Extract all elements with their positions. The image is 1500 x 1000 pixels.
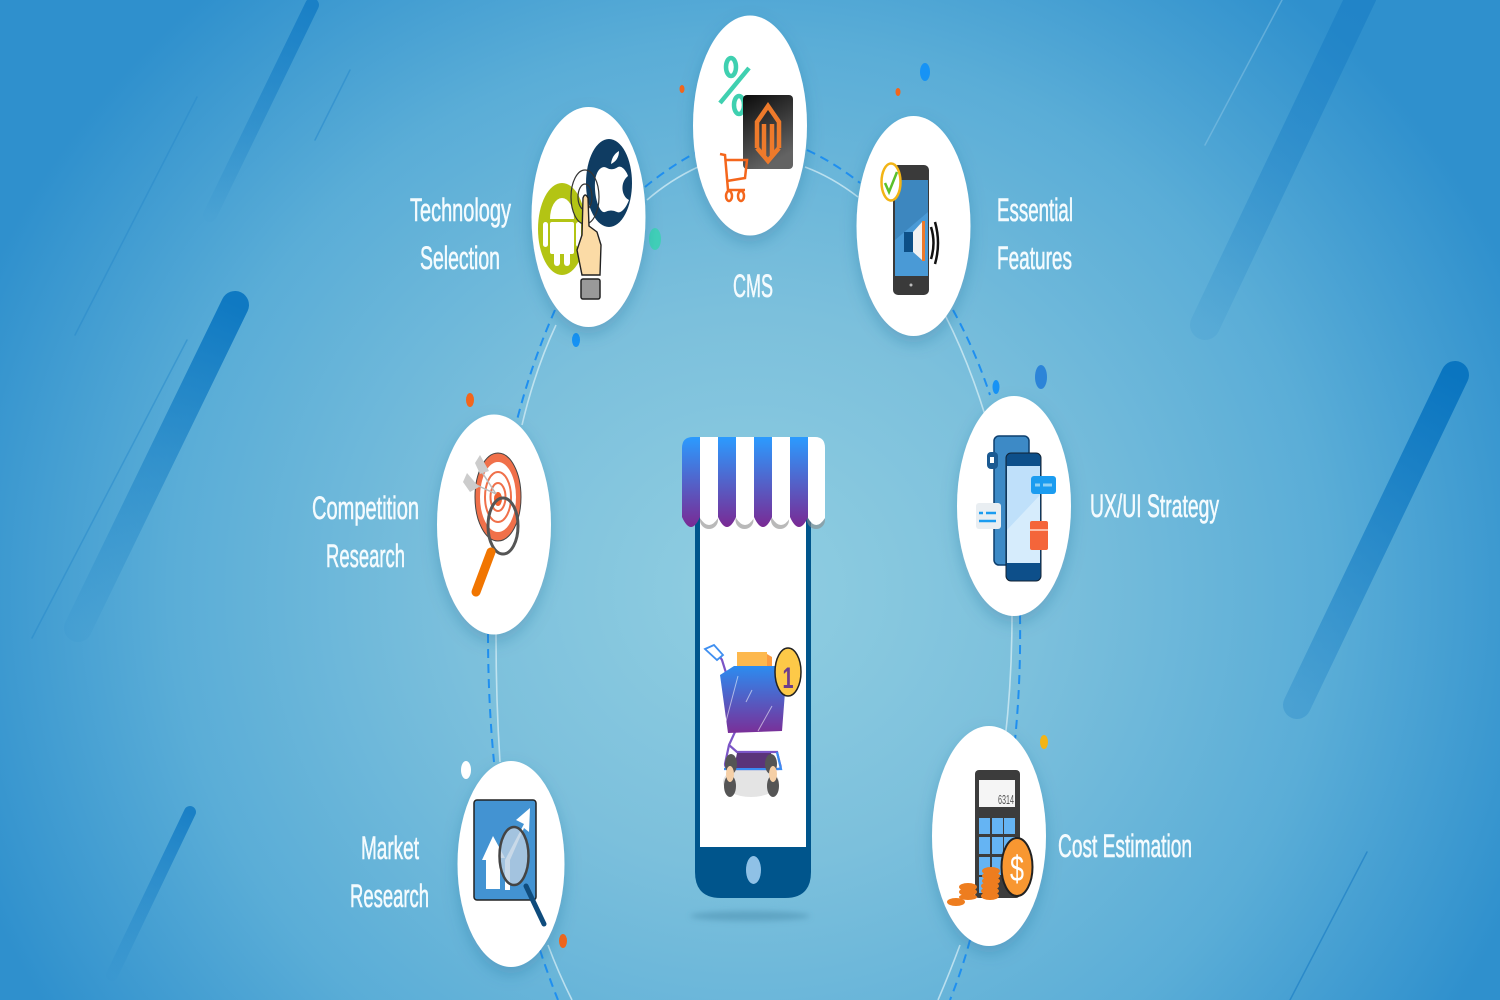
label: UX/UI Strategy: UX/UI Strategy (1090, 488, 1219, 524)
label: Essential Features (997, 192, 1073, 276)
connecting ring: white line (496, 167, 1012, 1000)
label: Technology Selection: Selection (420, 240, 500, 276)
panel: Cost Estimation icon: $ (1010, 848, 1024, 889)
panel: CMS icon (693, 16, 807, 236)
awning (682, 437, 825, 529)
label: Technology Selection: Technology (410, 192, 511, 228)
panel: Technology Selection icon (532, 107, 646, 327)
icon: shopping cart with badge (705, 645, 801, 797)
label: Essential Features: Essential (997, 192, 1073, 228)
decorative dots (461, 63, 1048, 948)
panel: UX/UI Strategy icon (957, 396, 1071, 616)
label: CMS: CMS (733, 268, 773, 304)
icon: shopping cart with badge: 1 (782, 662, 794, 695)
central storefront phone (682, 437, 825, 921)
connecting ring: blue dashed line (488, 150, 1020, 1000)
label: Competition Research (312, 490, 419, 574)
label: Market Research (350, 830, 429, 914)
panel: Competition Research icon (437, 414, 551, 634)
label: Market Research: Research (350, 878, 429, 914)
label: Market Research: Market (361, 830, 419, 866)
label: Competition Research: Competition (312, 490, 419, 526)
label: Technology Selection (410, 192, 511, 276)
panel: Cost Estimation icon: 6314 (998, 792, 1014, 807)
panel: Market Research icon (458, 761, 564, 967)
label: Essential Features: Features (997, 240, 1072, 276)
label: Competition Research: Research (326, 538, 405, 574)
panel: Cost Estimation icon (932, 726, 1046, 946)
label: Cost Estimation: Cost Estimation (1058, 828, 1192, 864)
panel: Essential Features icon (856, 116, 970, 336)
